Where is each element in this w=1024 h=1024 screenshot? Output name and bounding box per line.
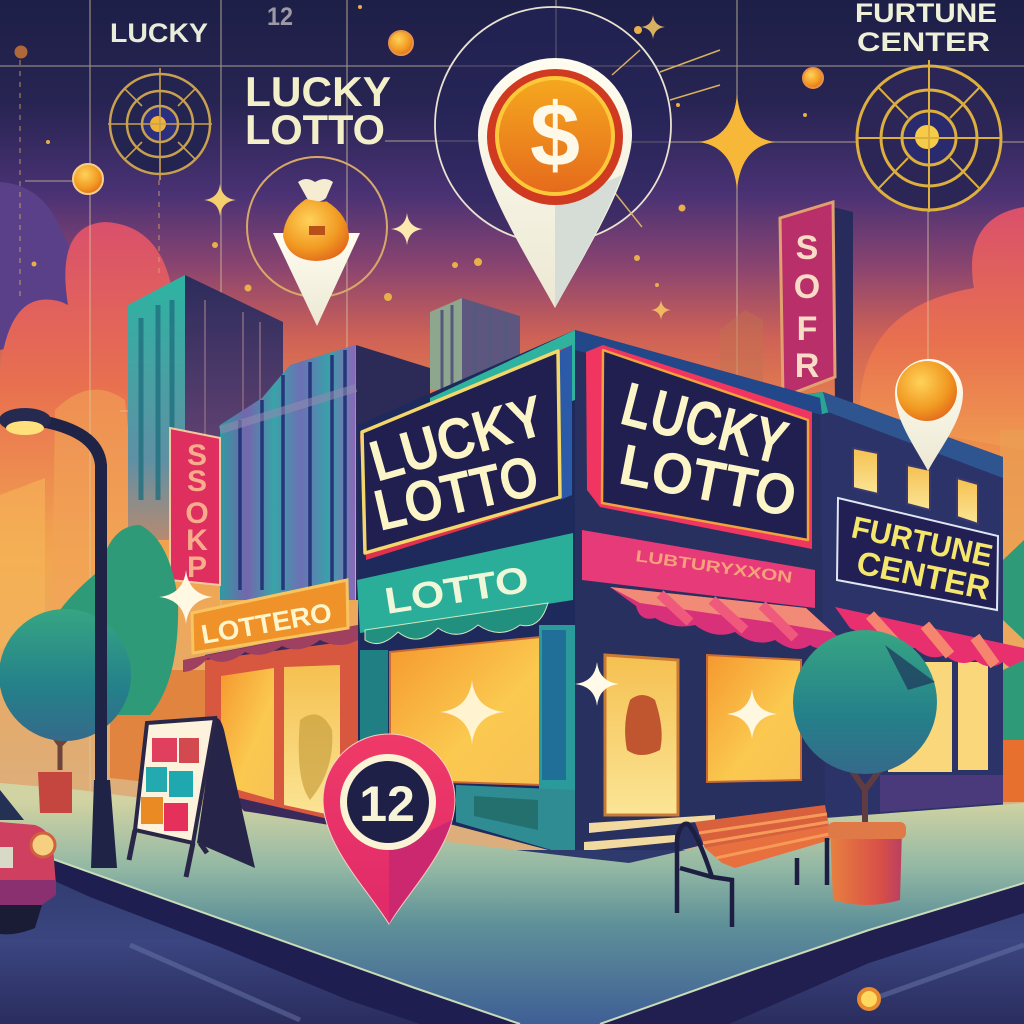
heading: 12 small: 12 <box>267 3 293 31</box>
kerb right <box>590 880 1024 1024</box>
sign: right LUCKY LOTTO: LOTTO <box>615 432 802 530</box>
vertical sign SSOKP <box>170 428 220 585</box>
teal awning LOTTO <box>357 533 573 644</box>
heading: LUCKY LOTTO: LUCKY <box>245 68 391 115</box>
sign: left LUCKY LOTTO: LUCKY <box>363 383 552 494</box>
vertical sign SOFR: F <box>797 310 817 348</box>
sign: LOTTERO <box>192 580 348 653</box>
sign: right LUCKY LOTTO: LUCKY <box>614 370 794 479</box>
base of right shop <box>880 775 1003 812</box>
vertical sign SOFR: S <box>796 229 818 267</box>
shop windows <box>221 668 274 800</box>
red cloud right <box>860 207 1024 450</box>
icon: money bag <box>283 179 349 261</box>
heading: LUCKY small: LUCKY <box>110 18 208 48</box>
far right orange shop edge <box>1003 740 1024 802</box>
sign: left LUCKY LOTTO: LOTTO <box>368 443 545 544</box>
awning <box>183 625 358 672</box>
gold coin far left <box>14 46 28 58</box>
shop window with small star <box>707 655 801 782</box>
gold coin top <box>389 31 413 55</box>
teal column centre <box>456 625 575 857</box>
heading: FURTUNE CENTER: CENTER <box>857 27 990 57</box>
sign: right LUCKY LOTTO <box>586 345 812 549</box>
left shop <box>183 580 358 830</box>
vertical sign SOFR: O <box>794 268 820 306</box>
upper windows <box>853 448 978 524</box>
distant building right <box>1000 430 1024 600</box>
road highlight <box>130 945 1024 1020</box>
street lamp <box>0 408 117 868</box>
target icon right <box>857 60 1001 212</box>
vertical sign SSOKP: O <box>185 497 209 530</box>
sparkle near door <box>575 662 619 706</box>
icon: dollar coin: $ <box>530 86 580 186</box>
gold sparkle dots <box>32 5 807 301</box>
vertical sign SOFR <box>780 202 853 405</box>
awning right <box>835 607 1024 669</box>
right building: Fortune Center <box>783 392 1024 830</box>
large dollar map pin <box>478 58 632 308</box>
vertical sign SSOKP: P <box>187 551 207 584</box>
vertical sign SOFR: R <box>795 347 819 385</box>
red cloud left <box>0 222 176 520</box>
back building <box>430 298 520 390</box>
vertical sign SSOKP: S <box>187 465 207 498</box>
sign: FURTUNE CENTER: FURTUNE <box>849 510 996 574</box>
gold coin left <box>73 164 103 194</box>
teal column left <box>360 650 388 778</box>
kerb edge highlight <box>50 858 1024 1024</box>
back tree <box>60 525 178 715</box>
orange glow beside left shop <box>110 670 222 790</box>
left shop: LOTTERO <box>199 597 334 650</box>
sign: FURTUNE CENTER: CENTER <box>854 544 993 607</box>
middle building <box>220 345 430 600</box>
bench <box>677 805 830 927</box>
door steps <box>584 815 715 851</box>
red door frame <box>205 640 358 826</box>
left tree <box>0 609 131 813</box>
lower glow cloud <box>50 390 160 720</box>
sidewalk <box>0 783 1024 1024</box>
number 12 map pin <box>323 734 455 924</box>
heading: LUCKY LOTTO: LOTTO <box>245 106 385 153</box>
sparkle near sign <box>159 570 213 624</box>
door with bag <box>605 655 678 815</box>
distant tower right <box>720 310 763 400</box>
main corner building <box>357 330 837 863</box>
number 12 map pin: 12 <box>359 776 415 832</box>
sidewalk and road <box>0 783 1024 1024</box>
shop window with star <box>390 637 541 785</box>
pink sign band <box>582 530 815 608</box>
tall teal skyscraper <box>128 275 283 540</box>
teal awning LOTTO: LOTTO <box>382 559 531 622</box>
car <box>0 790 56 934</box>
stars <box>204 15 775 320</box>
sign: FURTUNE CENTER <box>837 498 998 610</box>
sign: left LUCKY LOTTO <box>360 345 572 560</box>
target icon left <box>108 68 212 180</box>
kerb left <box>48 858 600 1024</box>
right tree <box>793 630 937 905</box>
distant building left <box>0 478 45 650</box>
pink sign band: LUBTURYXXON <box>634 548 793 587</box>
gold figure in door <box>299 714 332 800</box>
sandwich board sign <box>129 718 255 877</box>
large target ring behind pin <box>435 7 720 243</box>
small map pin right <box>895 359 963 471</box>
vertical sign SSOKP: S <box>187 439 207 472</box>
purple cloud <box>0 182 78 350</box>
background clouds <box>0 182 1024 790</box>
icon: dollar coin <box>487 69 623 205</box>
ground coin <box>859 989 879 1009</box>
road <box>0 850 1024 1024</box>
vertical sign SSOKP: K <box>186 524 208 557</box>
far right tree edge <box>1003 540 1024 740</box>
small bag map pin <box>247 157 387 326</box>
pink striped awning <box>610 587 837 649</box>
gold coin right <box>803 68 823 88</box>
shop window right <box>888 662 988 772</box>
